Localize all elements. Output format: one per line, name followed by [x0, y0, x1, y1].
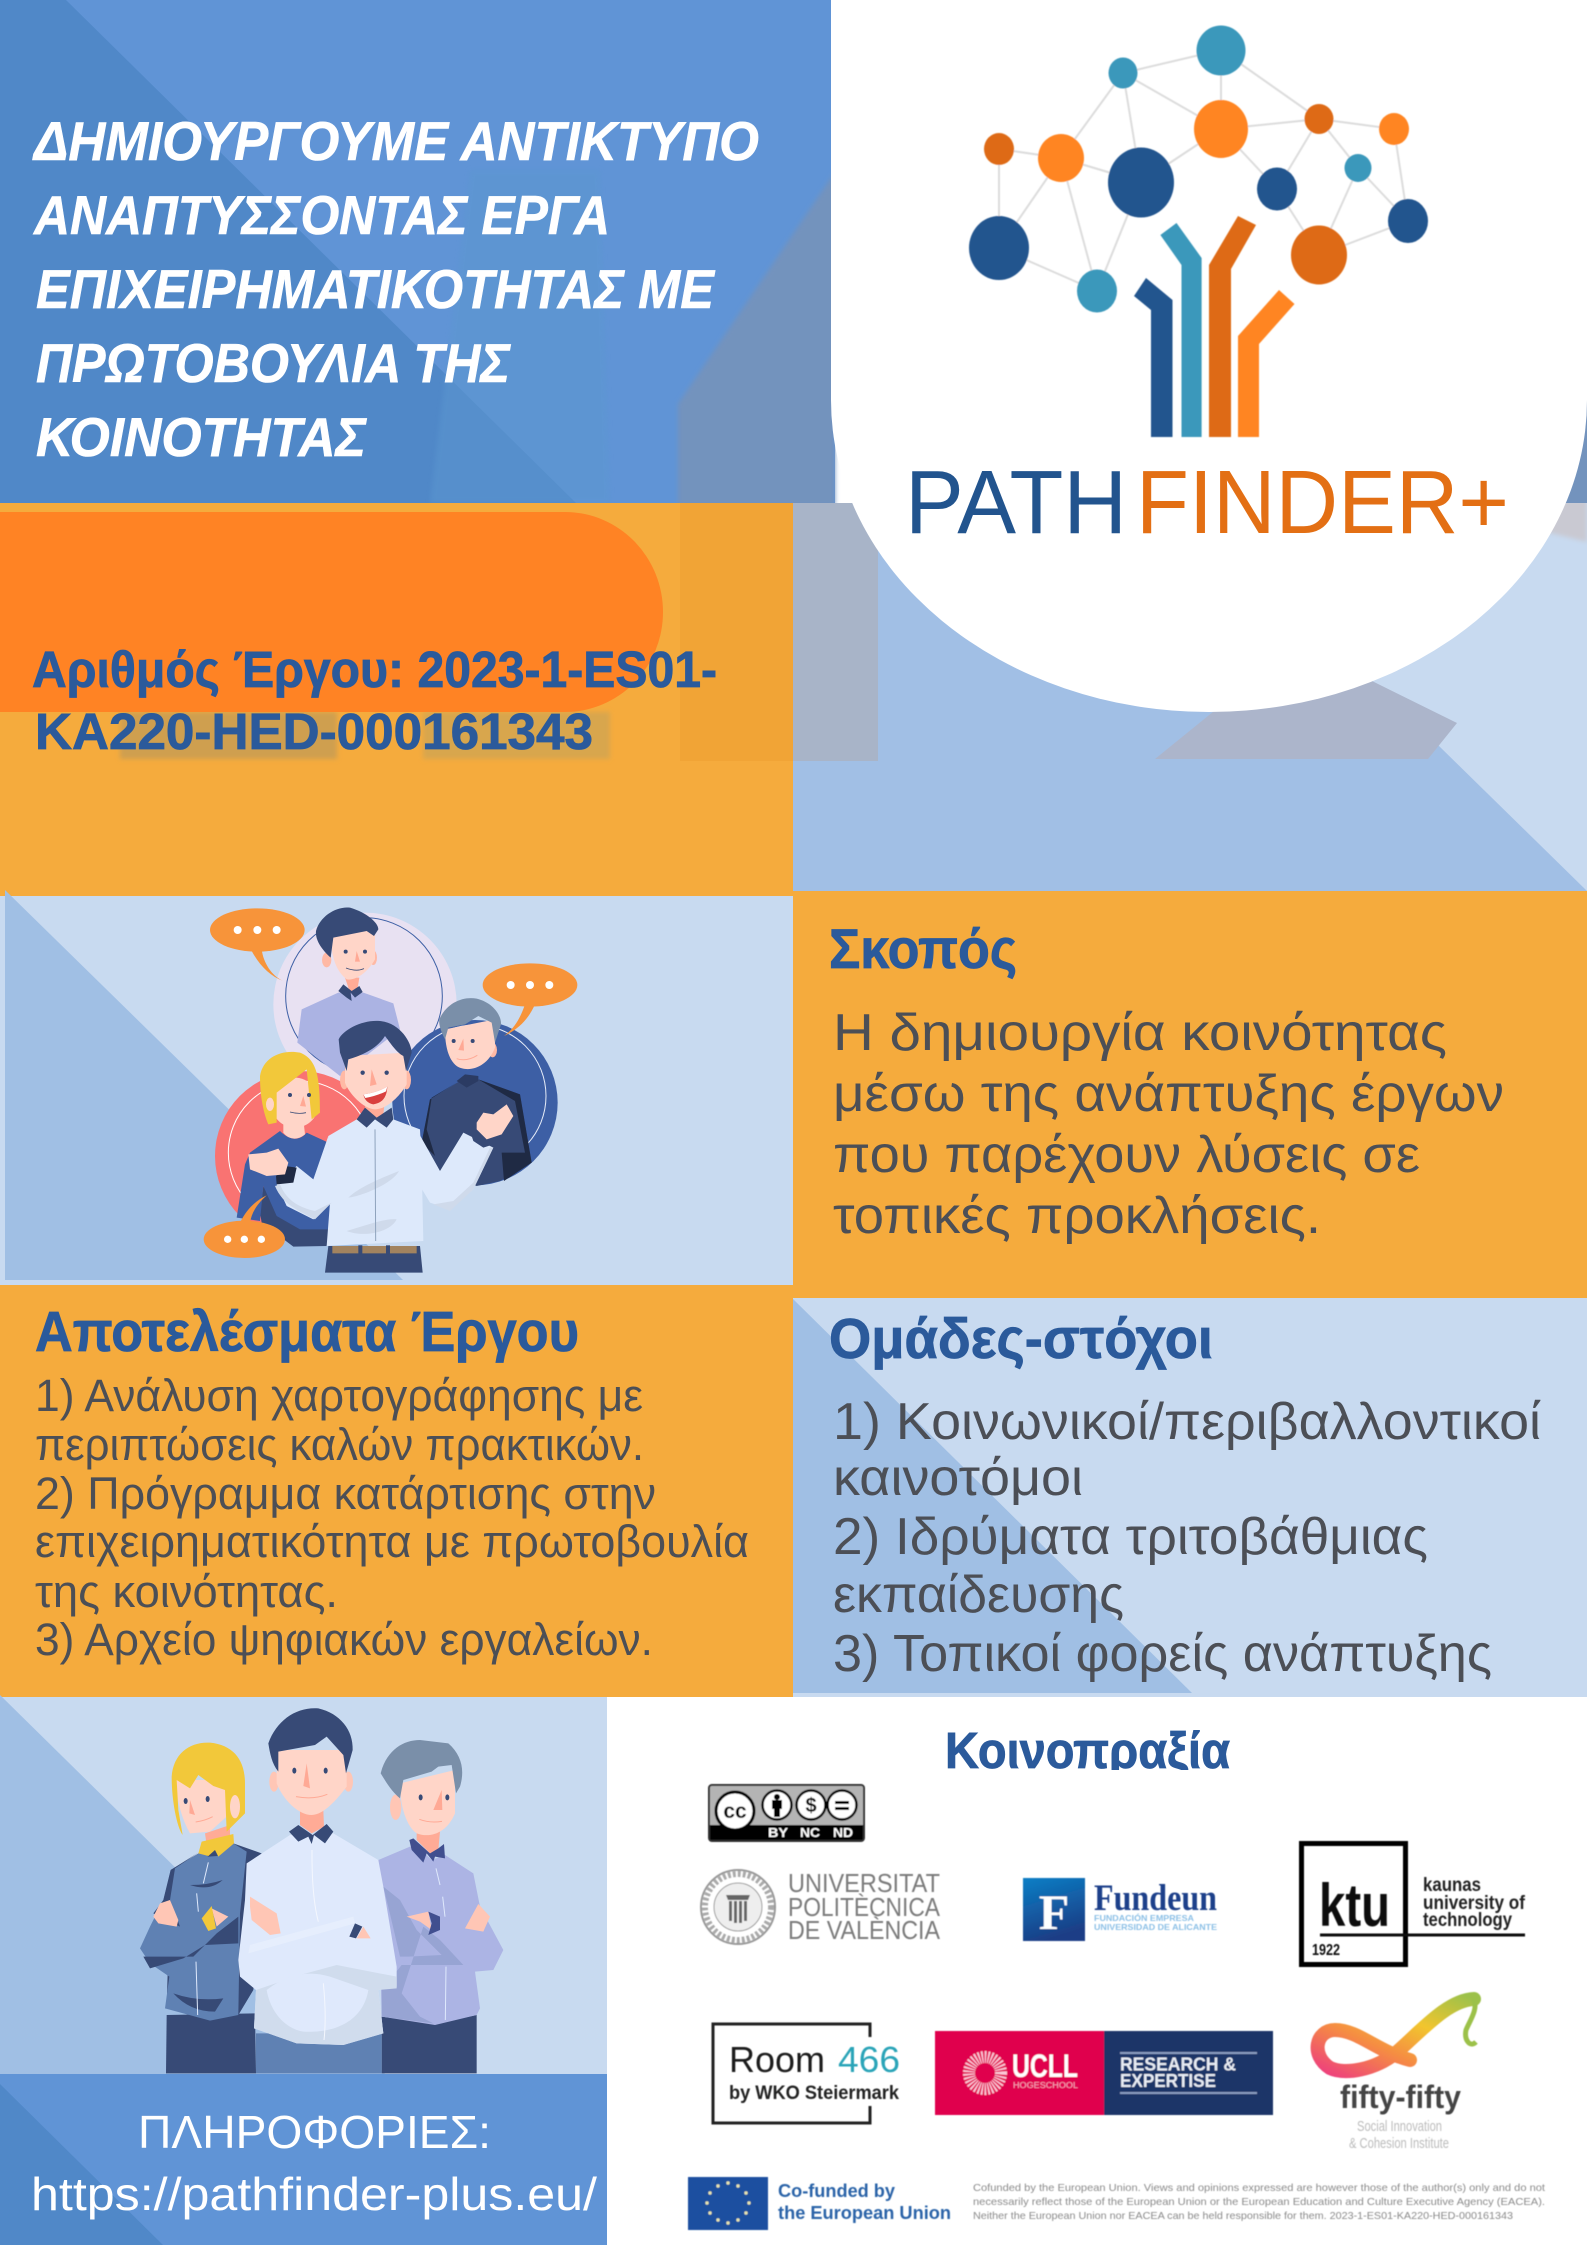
heading: results: Αποτελέσματα Έργου: [35, 1300, 579, 1364]
logo: UCLL research and expertise: UCLL: [1012, 2048, 1078, 2084]
title text: [32, 110, 759, 468]
logo: Universitat Politecnica de Valencia: UNIVERSITAT: [788, 1868, 940, 1898]
logo: creative commons: cc: [723, 1800, 747, 1823]
panel: right background: [793, 380, 1587, 893]
target groups list: 1) Κοινωνικοί/περιβαλλοντικοί: [833, 1393, 1541, 1451]
person: centre man: [238, 1708, 397, 2073]
logo: KTU: kaunas: [1423, 1875, 1481, 1896]
logo: Universitat Politecnica de Valencia: POLITÈCNICA: [788, 1892, 941, 1922]
title text: ΔΗΜΙΟΥΡΓΟΥΜΕ ΑΝΤΙΚΤΥΠΟ: [32, 110, 759, 172]
title text: ΕΠΙΧΕΙΡΗΜΑΤΙΚΟΤΗΤΑΣ ΜΕ: [36, 258, 716, 320]
logo: fifty-fifty: [1318, 1999, 1476, 2152]
target groups list: 3) Τοπικοί φορείς ανάπτυξης: [833, 1625, 1492, 1683]
results list: 2) Πρόγραμμα κατάρτισης στην: [35, 1468, 656, 1519]
results list: 1) Ανάλυση χαρτογράφησης με: [35, 1370, 643, 1421]
target groups list: εκπαίδευσης: [833, 1566, 1124, 1624]
logo: creative commons: $: [805, 1795, 817, 1817]
logo: creative commons: [709, 1785, 864, 1841]
heading: consortium: Κοινοπραξία: [945, 1722, 1230, 1779]
purpose text: Η δημιουργία κοινότητας: [833, 1004, 1447, 1062]
results list: επιχειρηματικότητα με πρωτοβουλία: [35, 1516, 749, 1567]
purpose text: τοπικές προκλήσεις.: [833, 1187, 1321, 1245]
logo: PATHFINDER+: [831, 0, 1587, 712]
panel: purpose: [793, 891, 1587, 1298]
orange pill: [0, 512, 663, 712]
wordmark: PATH: [905, 453, 1127, 553]
speech bubbles: [204, 908, 577, 1258]
title text: ΚΟΙΝΟΤΗΤΑΣ: [36, 406, 367, 468]
logo: Room 466: [713, 2024, 900, 2123]
person: front man: [248, 1021, 513, 1273]
logo: fifty-fifty: Social Innovation: [1357, 2118, 1442, 2135]
person: blonde woman: [237, 1052, 332, 1247]
logo: Fundeun: Fundeun: [1094, 1878, 1217, 1919]
heading: purpose: Σκοπός: [829, 917, 1017, 980]
logo: Fundeun: UNIVERSIDAD DE ALICANTE: [1094, 1922, 1217, 1932]
person: top man: [297, 907, 400, 1076]
panel: title: [0, 0, 835, 506]
logo: KTU: ktu: [1319, 1872, 1390, 1939]
project number text: KA220-HED-000161343: [35, 703, 593, 760]
logo: co-funded by the European Union: the European Union: [778, 2203, 951, 2223]
panel: target groups: [793, 1298, 1587, 1697]
disclaimer text: Neither the European Union nor EACEA can be held responsible for them. 2023-1-ES01-KA220-HED-000161343: [973, 2210, 1513, 2222]
logo: Room 466: 466: [838, 2039, 900, 2080]
logo: KTU: university of: [1423, 1893, 1526, 1914]
wordmark: FINDER+: [1136, 453, 1509, 553]
results list: 3) Αρχείο ψηφιακών εργαλείων.: [35, 1614, 653, 1665]
person: woman: [140, 1743, 263, 2073]
panel: project results: [0, 1285, 793, 1697]
title text: ΑΝΑΠΤΥΣΣΟΝΤΑΣ ΕΡΓΑ: [32, 184, 610, 246]
disclaimer text: necessarily reflect those of the European Union or the European Education and Culture Executive Agency (EACEA).: [973, 2196, 1545, 2208]
logo: KTU: 1922: [1312, 1942, 1340, 1959]
logo: KTU: [1302, 1844, 1526, 1964]
logo: Room 466: Room: [729, 2039, 825, 2080]
logo: Fundeun: [1023, 1878, 1217, 1941]
panel: illustration three people: [0, 1695, 607, 2074]
title text: ΠΡΩΤΟΒΟΥΛΙΑ ΤΗΣ: [36, 332, 511, 394]
logo: fifty-fifty: fifty-fifty: [1340, 2079, 1461, 2115]
info label: ΠΛΗΡΟΦΟΡΙΕΣ:: [138, 2106, 491, 2158]
logo: fifty-fifty: & Cohesion Institute: [1349, 2135, 1449, 2152]
person: older man: [422, 998, 532, 1186]
logo: UCLL research and expertise: EXPERTISE: [1120, 2071, 1216, 2091]
project number text: [32, 641, 717, 760]
logo: co-funded by the European Union: [688, 2177, 951, 2230]
logo: KTU: technology: [1423, 1910, 1512, 1931]
logo: creative commons: NC: [800, 1825, 821, 1840]
logo: co-funded by the European Union: Co-funded by: [778, 2181, 895, 2201]
logo: Universitat Politecnica de Valencia: [701, 1868, 941, 1945]
results list: [35, 1370, 749, 1665]
disclaimer text: Cofunded by the European Union. Views and opinions expressed are however those of the author(s) only and do not: [973, 2182, 1545, 2194]
target groups list: 2) Ιδρύματα τριτοβάθμιας: [833, 1508, 1428, 1566]
results list: περιπτώσεις καλών πρακτικών.: [35, 1419, 644, 1470]
illustration: four people talking: [204, 907, 577, 1273]
target groups list: καινοτόμοι: [833, 1449, 1083, 1507]
logo: UCLL research and expertise: [935, 2031, 1273, 2115]
logo: UCLL research and expertise: RESEARCH &: [1120, 2054, 1236, 2074]
results list: της κοινότητας.: [35, 1566, 338, 1617]
purpose text: μέσω της ανάπτυξης έργων: [833, 1065, 1504, 1123]
logo: creative commons: BY: [768, 1825, 788, 1840]
logo: Fundeun: FUNDACIÓN EMPRESA: [1094, 1912, 1194, 1923]
heading: target groups: Ομάδες-στόχοι: [829, 1307, 1213, 1371]
network tree icon: [969, 26, 1428, 437]
logo: Fundeun: F: [1039, 1884, 1069, 1940]
purpose text: που παρέχουν λύσεις σε: [833, 1126, 1420, 1184]
website url: https://pathfinder-plus.eu/: [31, 2168, 597, 2220]
wordmark: [905, 453, 1509, 553]
panel: project number: [0, 503, 793, 896]
target groups list: [833, 1393, 1541, 1683]
panel: consortium: [687, 1730, 1546, 2231]
logo: creative commons: ND: [833, 1825, 853, 1840]
project number text: Αριθμός Έργου: 2023-1-ES01-: [32, 641, 717, 698]
illustration: three people with crossed arms: [140, 1708, 503, 2073]
panel: more information: [0, 2074, 607, 2245]
disclaimer text: [973, 2182, 1545, 2222]
person: right man: [378, 1740, 503, 2073]
logo: UCLL research and expertise: HOGESCHOOL: [1013, 2080, 1078, 2090]
purpose text: [833, 1004, 1504, 1245]
logo: Universitat Politecnica de Valencia: DE VALÈNCIA: [788, 1915, 941, 1945]
logo: Room 466: by WKO Steiermark: [729, 2083, 899, 2104]
panel: illustration talking team: [0, 890, 793, 1285]
